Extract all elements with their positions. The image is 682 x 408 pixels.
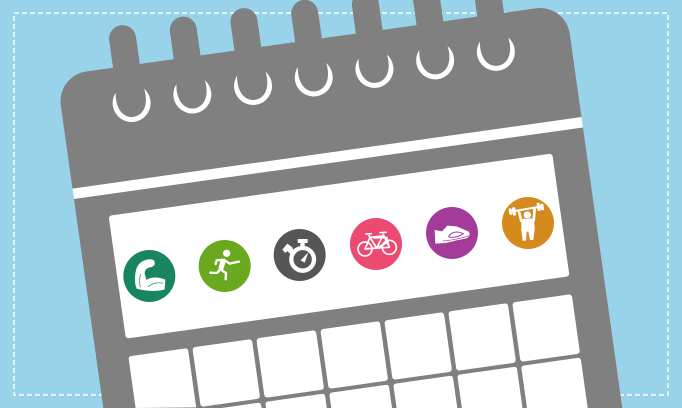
icon: runner xyxy=(199,240,251,292)
day cells grid xyxy=(129,294,588,408)
icon: weightlifter xyxy=(502,197,554,249)
header panel xyxy=(109,153,570,339)
icon: stopwatch xyxy=(274,229,326,281)
binding rings xyxy=(111,37,517,124)
spiral binding tabs xyxy=(107,0,508,96)
white separator band xyxy=(72,117,583,199)
icon: running shoe xyxy=(426,207,478,259)
icon: bicycle xyxy=(350,218,402,270)
icon: flexed muscle xyxy=(123,250,175,302)
